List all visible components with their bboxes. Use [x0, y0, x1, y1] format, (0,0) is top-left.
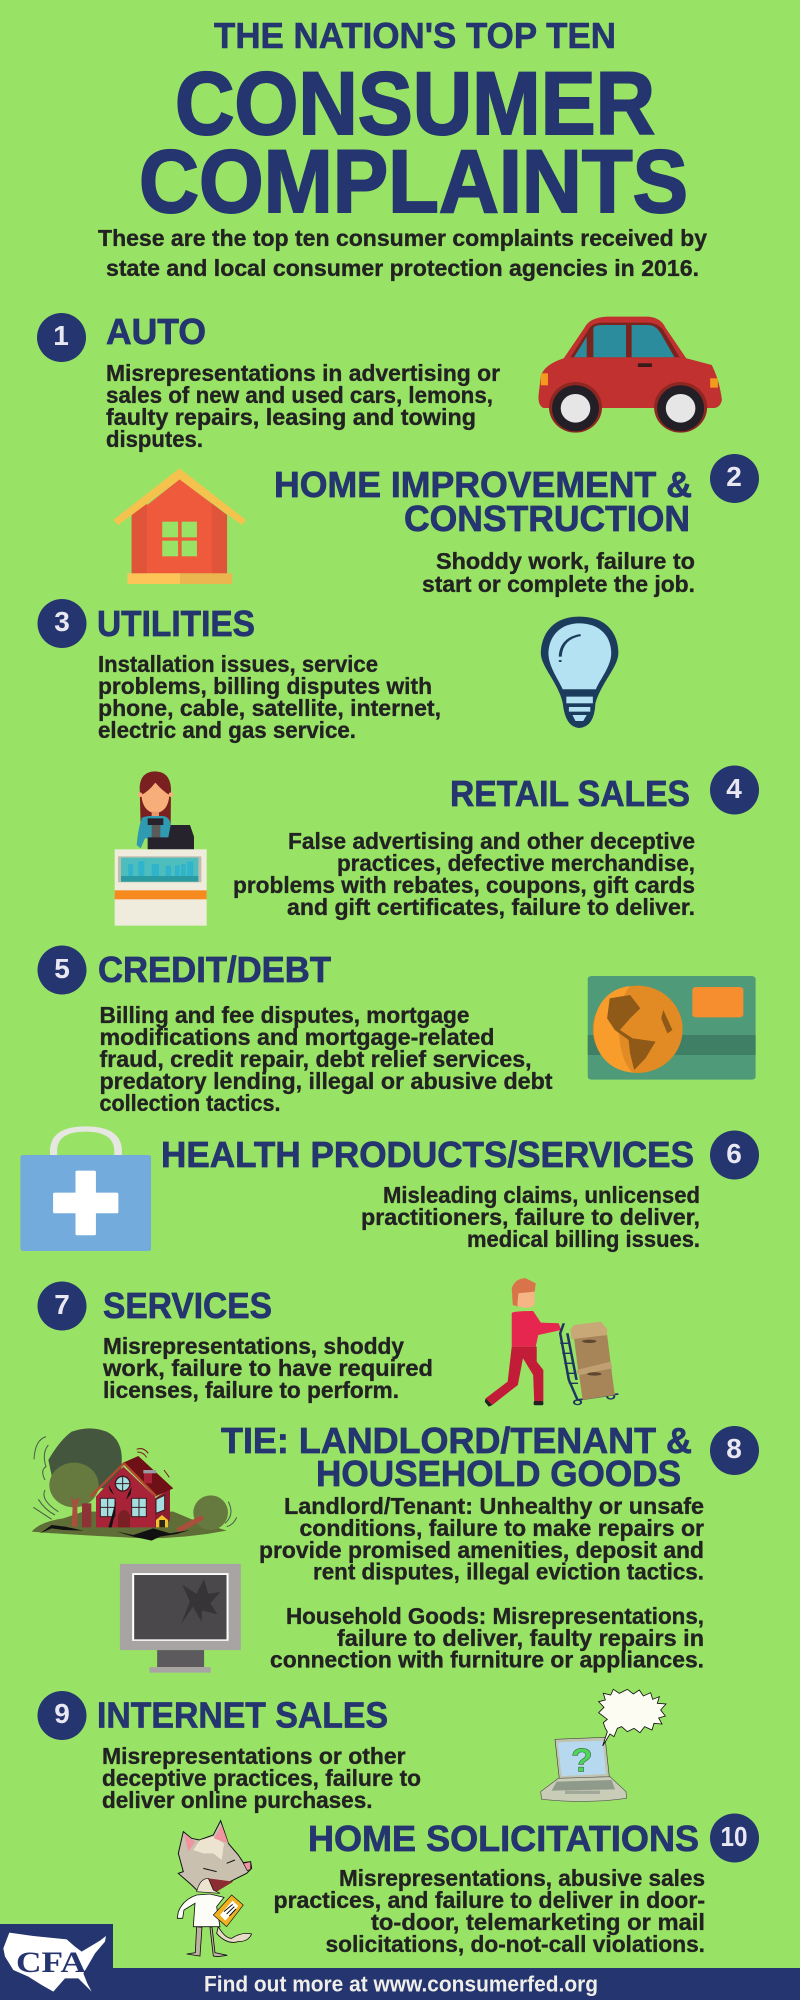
icon: wolf with clipboard: [177, 1821, 252, 1957]
text: health description: [361, 1182, 700, 1252]
icon: medical bag: [20, 1126, 151, 1251]
text: credit description: predatory lending, illegal or abusive debt: [100, 1068, 553, 1094]
icon: laptop with speech bubble: [541, 1689, 666, 1801]
heading: tie landlord/tenant and household goods: HOUSEHOLD GOODS: [316, 1453, 681, 1494]
text: solicitations description: [274, 1865, 705, 1957]
panel: 3 utilities: [38, 599, 618, 743]
heading: home improvement and construction: CONSTRUCTION: [404, 498, 690, 539]
panel: 4 retail sales: [115, 766, 759, 926]
logo: CFA: CFA: [16, 1946, 86, 1979]
title kicker: THE NATION'S TOP TEN: [214, 15, 616, 56]
text: credit description: [100, 1002, 553, 1116]
text: solicitations description: solicitations, do-not-call violations.: [326, 1931, 705, 1957]
text: landlord/tenant description: provide promised amenities, deposit and: [259, 1537, 704, 1563]
text: auto description: disputes.: [106, 426, 203, 452]
icon: house: [113, 468, 246, 584]
text: retail description: False advertising and other deceptive: [288, 828, 695, 854]
panel: 9 internet sales: [38, 1689, 666, 1813]
number badge 9: 9: [54, 1698, 70, 1729]
number badge 10: [710, 1814, 759, 1862]
text: solicitations description: practices, and failure to deliver in door-: [274, 1887, 705, 1913]
intro text: state and local consumer protection agencies in 2016.: [106, 255, 699, 281]
text: home improvement description: start or complete the job.: [422, 571, 695, 597]
number badge 7: [38, 1282, 86, 1330]
number badge 5: 5: [54, 953, 70, 984]
intro text: These are the top ten consumer complaints received by: [98, 225, 707, 251]
text: solicitations description: to-door, telemarketing or mail: [371, 1909, 705, 1935]
text: landlord/tenant description: [259, 1493, 704, 1584]
text: utilities description: problems, billing disputes with: [98, 673, 432, 699]
number badge 4: 4: [726, 773, 742, 804]
footer band: [0, 1968, 800, 2000]
text: auto description: Misrepresentations in advertising or: [106, 360, 500, 386]
text: utilities description: phone, cable, satellite, internet,: [98, 695, 441, 721]
text: retail description: problems with rebates, coupons, gift cards: [233, 872, 695, 898]
text: retail description: and gift certificates, failure to deliver.: [287, 894, 695, 920]
number badge 9: [38, 1691, 86, 1740]
text: services description: work, failure to have required: [102, 1355, 433, 1381]
icon: laptop with speech bubble: ?: [571, 1743, 593, 1780]
icon: delivery man with boxes: [485, 1278, 618, 1407]
heading: home solicitations: HOME SOLICITATIONS: [308, 1818, 699, 1859]
heading: services: SERVICES: [103, 1285, 272, 1326]
text: utilities description: electric and gas service.: [98, 717, 356, 743]
footer link text: Find out more at www.consumerfed.org: [204, 1972, 598, 1996]
heading: utilities: UTILITIES: [97, 603, 255, 644]
title line: consumer: CONSUMER: [175, 53, 655, 153]
icon: credit card with globe: [588, 976, 756, 1080]
text: internet description: [102, 1743, 421, 1813]
panel: 7 services: [38, 1278, 618, 1407]
title: [139, 15, 688, 231]
intro text: [98, 225, 707, 281]
heading: auto: AUTO: [106, 311, 206, 352]
heading: credit/debt: CREDIT/DEBT: [98, 949, 331, 990]
heading: retail sales: RETAIL SALES: [450, 773, 690, 814]
heading: tie landlord/tenant and household goods: [221, 1420, 692, 1494]
heading: internet sales: INTERNET SALES: [97, 1694, 388, 1736]
heading: health products/services: HEALTH PRODUCTS/SERVICES: [161, 1134, 694, 1175]
text: services description: [102, 1333, 433, 1403]
text: credit description: collection tactics.: [100, 1090, 280, 1116]
icon: damaged house: [32, 1428, 237, 1541]
text: retail description: [233, 828, 695, 920]
text: household goods description: [270, 1603, 704, 1672]
title line: complaints: COMPLAINTS: [139, 131, 688, 231]
text: household goods description: failure to deliver, faulty repairs in: [337, 1625, 704, 1651]
text: home improvement description: [422, 548, 695, 597]
icon: cashier at counter: [115, 771, 207, 926]
text: utilities description: Installation issues, service: [98, 651, 378, 677]
panel: 6 health products/services: [20, 1126, 759, 1252]
number badge 1: [37, 313, 86, 362]
text: landlord/tenant description: conditions, failure to make repairs or: [300, 1515, 704, 1541]
panel: 8 landlord/tenant and household goods: [32, 1420, 759, 1673]
text: services description: licenses, failure to perform.: [103, 1377, 399, 1403]
icon: light bulb: [541, 617, 618, 728]
text: utilities description: [98, 651, 441, 743]
text: household goods description: connection with furniture or appliances.: [270, 1646, 704, 1672]
text: landlord/tenant description: Landlord/Tenant: Unhealthy or unsafe: [284, 1493, 704, 1519]
text: auto description: faulty repairs, leasing and towing: [106, 404, 476, 430]
panel: 5 credit/debt: [38, 946, 756, 1116]
heading: home improvement and construction: HOME IMPROVEMENT &: [274, 464, 692, 505]
number badge 10: 10: [720, 1821, 748, 1852]
number badge 1: 1: [53, 320, 69, 351]
text: landlord/tenant description: rent disputes, illegal eviction tactics.: [313, 1558, 704, 1584]
number badge 8: 8: [726, 1433, 742, 1464]
text: home improvement description: Shoddy work, failure to: [436, 548, 695, 574]
number badge 6: 6: [726, 1138, 742, 1169]
text: internet description: deliver online purchases.: [102, 1787, 372, 1813]
text: internet description: deceptive practices, failure to: [102, 1765, 421, 1791]
text: internet description: Misrepresentations or other: [102, 1743, 406, 1769]
heading: tie landlord/tenant and household goods: TIE: LANDLORD/TENANT &: [221, 1420, 692, 1461]
text: services description: Misrepresentations, shoddy: [103, 1333, 404, 1359]
text: retail description: practices, defective merchandise,: [337, 850, 695, 876]
panel: 1 auto: [37, 311, 722, 452]
text: auto description: sales of new and used cars, lemons,: [106, 382, 493, 408]
number badge 2: 2: [726, 461, 742, 492]
text: health description: practitioners, failure to deliver,: [361, 1204, 700, 1230]
panel: 10 home solicitations: [177, 1814, 759, 1957]
number badge 7: 7: [54, 1289, 70, 1320]
icon: broken monitor: [120, 1564, 241, 1673]
text: solicitations description: Misrepresentations, abusive sales: [339, 1865, 705, 1891]
text: auto description: [106, 360, 500, 452]
text: credit description: fraud, credit repair, debt relief services,: [100, 1046, 532, 1072]
icon: red car: [538, 317, 722, 433]
text: household goods description: Household Goods: Misrepresentations,: [286, 1603, 704, 1629]
number badge 3: [38, 599, 86, 648]
number badge 5: [38, 946, 86, 994]
number badge 6: [710, 1130, 759, 1180]
number badge 8: [710, 1426, 759, 1475]
text: credit description: modifications and mortgage-related: [100, 1024, 494, 1050]
text: health description: medical billing issues.: [467, 1226, 700, 1252]
number badge 2: [710, 454, 759, 503]
logo: CFA: [0, 1924, 113, 2000]
number badge 4: [710, 766, 759, 814]
text: health description: Misleading claims, unlicensed: [383, 1182, 700, 1208]
text: credit description: Billing and fee disputes, mortgage: [100, 1002, 470, 1028]
panel: 2 home improvement: [113, 454, 759, 597]
number badge 3: 3: [54, 606, 70, 637]
heading: home improvement and construction: [274, 464, 692, 539]
